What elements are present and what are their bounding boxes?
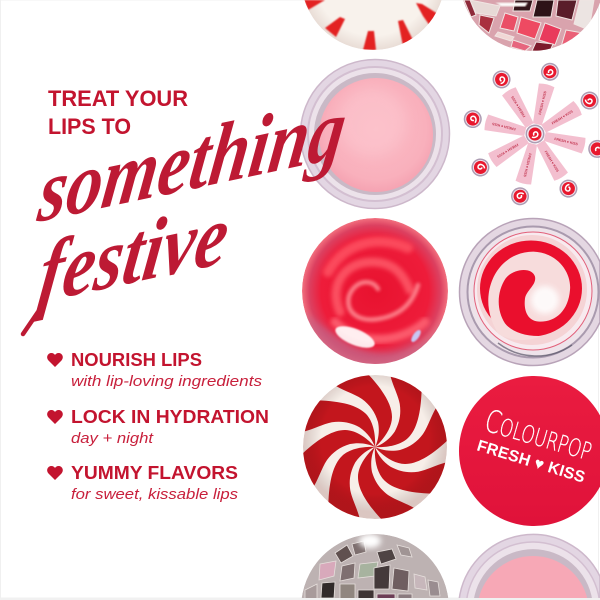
heading: treat your lips to: [48, 86, 188, 139]
heading: treat your lips to: TREAT YOUR: [48, 86, 188, 111]
tube 3 cap, cut by the frame: [588, 140, 600, 158]
icon: heart: [47, 353, 63, 367]
tube 4: FRESH ♥ KISS: [544, 150, 560, 173]
star of mini lip balm tubes: [462, 61, 600, 207]
benefit: lock in hydration: [47, 407, 269, 447]
benefit: nourish lips: [47, 350, 263, 390]
script headline: something: something: [32, 79, 352, 242]
tail of the letter f: [23, 312, 38, 334]
icon: heart: [47, 466, 63, 480]
lip balm jar, bottom right: [459, 534, 600, 600]
product name: fresh kiss: FRESH ♥ KISS: [475, 438, 587, 487]
benefit: yummy flavors: for sweet, kissable lips: [71, 486, 239, 503]
tube 7: [462, 108, 527, 140]
icon: heart: [47, 410, 63, 424]
disco ball, top right: [463, 0, 600, 51]
tube 6: [468, 132, 531, 180]
heading: treat your lips to: LIPS TO: [48, 114, 131, 139]
script headline: festive: festive: [33, 184, 235, 322]
benefit: nourish lips: NOURISH LIPS: [71, 350, 202, 370]
benefit: nourish lips: with lip-loving ingredients: [71, 373, 263, 390]
benefit: yummy flavors: [47, 463, 239, 503]
disco ball, bottom left: [301, 534, 449, 600]
tube 5: FRESH ♥ KISS: [522, 153, 532, 178]
tube 6: FRESH ♥ KISS: [496, 143, 519, 159]
tube 2: [539, 88, 600, 136]
tube 8: FRESH ♥ KISS: [510, 95, 526, 118]
glossy red swirl balm: [302, 218, 448, 369]
benefit: lock in hydration: day + night: [71, 430, 154, 447]
tube 1: FRESH ♥ KISS: [538, 90, 548, 115]
tube 3: [543, 129, 586, 154]
tube 1: [529, 61, 561, 126]
tube 4: [533, 138, 581, 201]
tube 3: FRESH ♥ KISS: [554, 137, 579, 147]
tube 8: [489, 67, 537, 130]
red lid label with logo: [459, 376, 600, 526]
tube 7: FRESH ♥ KISS: [491, 121, 516, 131]
peppermint swirl candy: [303, 375, 447, 519]
tube 2: FRESH ♥ KISS: [551, 109, 574, 125]
benefit: lock in hydration: LOCK IN HYDRATION: [71, 407, 269, 427]
tube 5: [509, 142, 541, 207]
centre cap: [526, 124, 544, 144]
bottom edge line: [0, 598, 600, 600]
peppermint candy, top left: [304, 0, 442, 50]
benefit: yummy flavors: YUMMY FLAVORS: [71, 463, 238, 483]
glass jar with red and white swirl: [459, 218, 600, 366]
lip balm jar, pink: [300, 60, 450, 208]
